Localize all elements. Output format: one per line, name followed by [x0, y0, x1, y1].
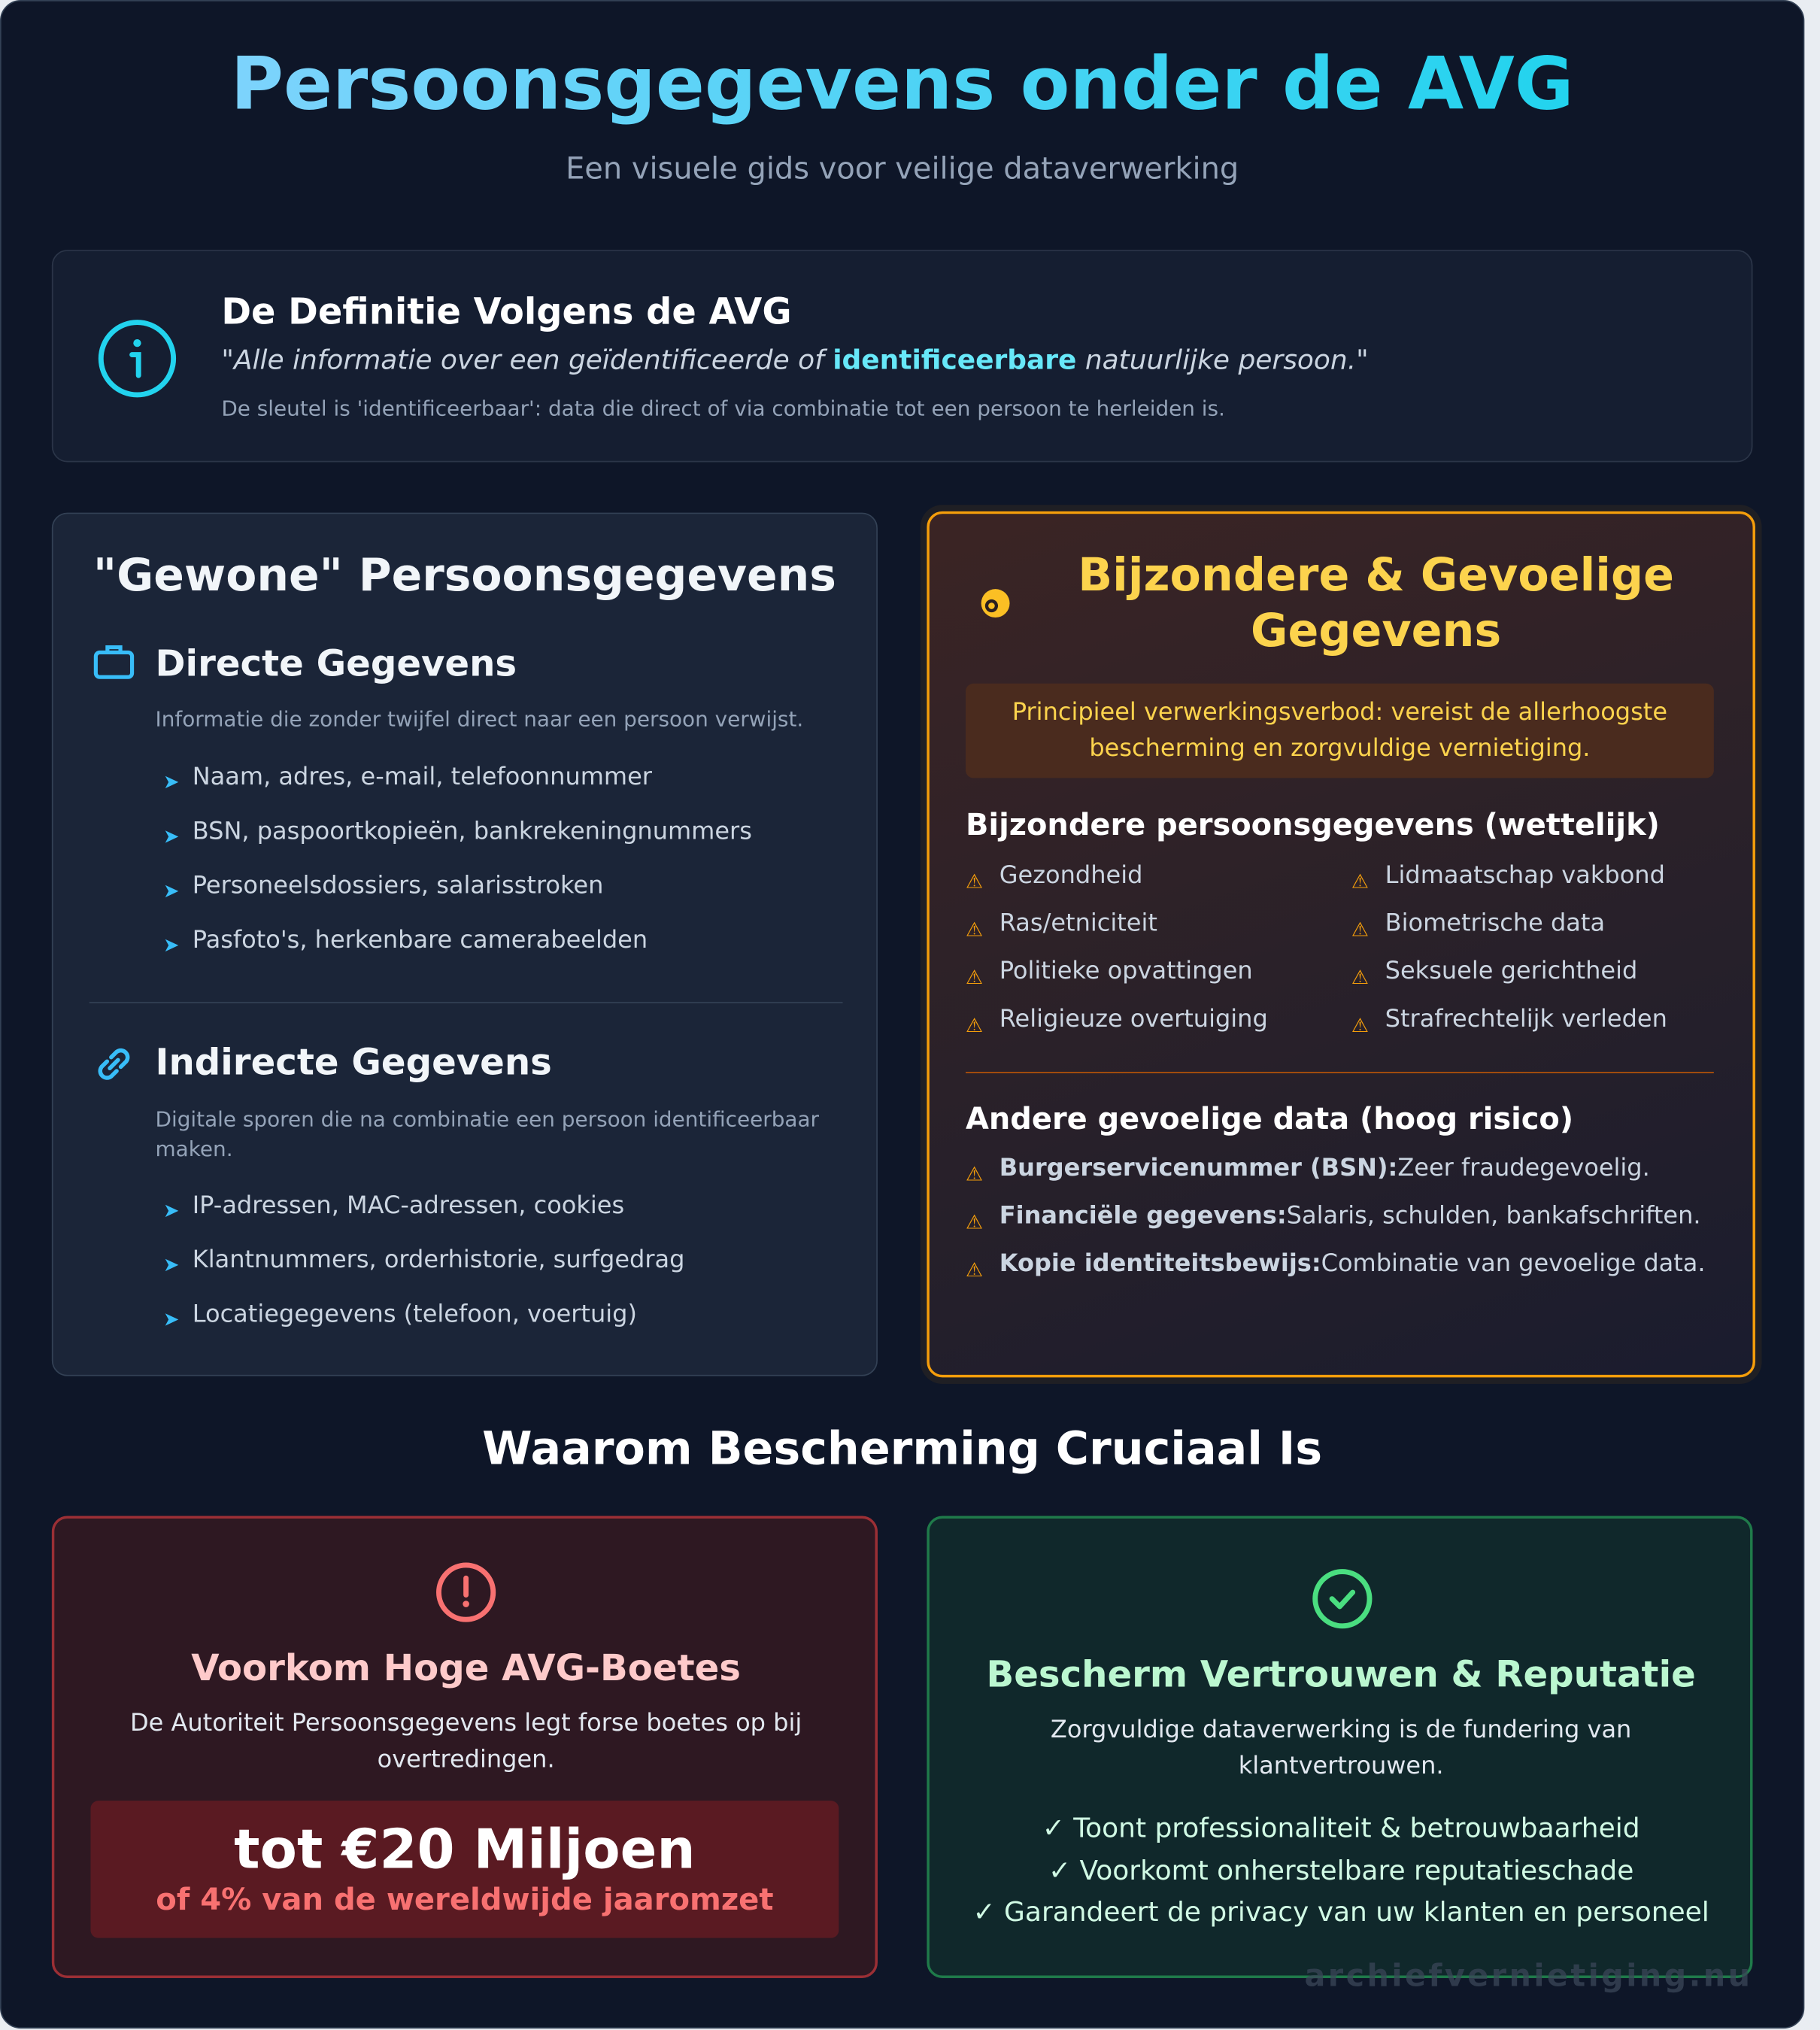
list: hoog risico: Kopie identiteitsbewijs:Combinatie van gevoelige data.: [999, 1251, 1706, 1278]
checklist: [973, 1813, 1709, 1928]
list: indirect: IP-adressen, MAC-adressen, cookies: [193, 1192, 624, 1219]
icon: briefcase: [93, 645, 134, 679]
list: direct: [163, 764, 752, 957]
subheading: indirect: Indirecte Gegevens: [156, 1041, 552, 1084]
icon: check: [1312, 1569, 1372, 1629]
callout: fine: tot €20 Miljoen: [234, 1818, 696, 1881]
subheading: wettelijk: Bijzondere persoonsgegevens (wettelijk): [966, 808, 1660, 842]
grid: categories: Biometrische data: [1385, 910, 1605, 937]
panel: gewone persoonsgegevens: [52, 513, 878, 1376]
list: hoog risico: Financiële gegevens:Salaris, schulden, bankafschriften.: [999, 1203, 1701, 1230]
grid: categories: Strafrechtelijk verleden: [1385, 1006, 1667, 1033]
description: direct: Informatie die zonder twijfel direct naar een persoon verwijst.: [156, 707, 803, 731]
icon: special: [981, 589, 1010, 617]
title: Persoonsgegevens onder de AVG: [231, 43, 1574, 127]
list: hoog risico: ⚠: [966, 1258, 983, 1282]
grid: categories: ⚠: [1351, 1014, 1369, 1037]
grid: categories: Ras/etniciteit: [999, 910, 1157, 937]
panel heading: "Gewone" Persoonsgegevens: [93, 551, 836, 602]
list: indirect: [163, 1192, 684, 1331]
panel: definition: [52, 250, 1752, 462]
description: klantvertrouwen.: [1239, 1752, 1444, 1780]
list: direct: Pasfoto's, herkenbare camerabeelden: [193, 927, 648, 954]
watermark: archiefvernietiging.nu: [1304, 1957, 1752, 1994]
grid: categories: ⚠: [1351, 870, 1369, 894]
grid: categories: ⚠: [966, 918, 983, 941]
grid: categories: Gezondheid: [999, 862, 1142, 889]
grid: categories: Religieuze overtuiging: [999, 1006, 1268, 1033]
callout: verbod: Principieel verwerkingsverbod: vereist de allerhoogste: [1012, 699, 1667, 727]
panel heading: Gegevens: [1251, 606, 1501, 657]
description: De Autoriteit Persoonsgegevens legt forse boetes op bij: [130, 1710, 802, 1737]
section heading: Waarom Bescherming Cruciaal Is: [482, 1424, 1322, 1476]
grid: categories: ⚠: [1351, 966, 1369, 989]
callout: fine: of 4% van de wereldwijde jaaromzet: [156, 1883, 774, 1917]
callout: verbod: bescherming en zorgvuldige vernietiging.: [1089, 736, 1590, 763]
description: [1051, 1716, 1631, 1780]
checklist: ✓ Voorkomt onherstelbare reputatieschade: [1048, 1855, 1633, 1886]
list: indirect: Klantnummers, orderhistorie, surfgedrag: [193, 1247, 684, 1274]
list: hoog risico: Burgerservicenummer (BSN):Zeer fraudegevoelig.: [999, 1155, 1650, 1182]
list: direct: BSN, paspoortkopieën, bankrekeningnummers: [193, 818, 752, 845]
grid: categories: Seksuele gerichtheid: [1385, 958, 1637, 985]
subtitle: Een visuele gids voor veilige dataverwerking: [566, 151, 1239, 187]
definition heading: De Definitie Volgens de AVG: [221, 290, 792, 332]
list: indirect: ➤: [163, 1307, 180, 1331]
grid: categories: Politieke opvattingen: [999, 958, 1253, 985]
list: direct: ➤: [163, 770, 180, 793]
panel: vertrouwen: [927, 1516, 1752, 1978]
description: [130, 1710, 802, 1774]
icon: alert: [436, 1563, 496, 1622]
list: hoog risico: ⚠: [966, 1210, 983, 1233]
panel heading: [1078, 551, 1674, 657]
list: hoog risico: ⚠: [966, 1163, 983, 1186]
list: direct: ➤: [163, 879, 180, 903]
list: direct: ➤: [163, 824, 180, 848]
quote: "Alle informatie over een geïdentificeerde of identificeerbare natuurlijke persoon.": [221, 344, 1369, 375]
grid: categories: [966, 862, 1667, 1037]
description: indirect: Digitale sporen die na combinatie een persoon identificeerbaar maken.: [156, 1107, 819, 1161]
grid: categories: Lidmaatschap vakbond: [1385, 862, 1665, 889]
note: De sleutel is 'identificeerbaar': data die direct of via combinatie tot een persoon te herleiden is.: [221, 396, 1225, 420]
list: hoog risico: [966, 1155, 1706, 1282]
grid: categories: ⚠: [966, 966, 983, 989]
panel heading: Bijzondere & Gevoelige: [1078, 551, 1674, 602]
list: indirect: ➤: [163, 1253, 180, 1276]
panel: boetes: [52, 1516, 878, 1978]
callout: verbod: [966, 684, 1714, 778]
grid: categories: ⚠: [966, 870, 983, 894]
heading: Bescherm Vertrouwen & Reputatie: [986, 1653, 1696, 1696]
subheading: direct: Directe Gegevens: [156, 642, 517, 685]
list: direct: Naam, adres, e-mail, telefoonnummer: [193, 764, 652, 791]
icon: link: [98, 1048, 129, 1080]
checklist: ✓ Garandeert de privacy van uw klanten en personeel: [973, 1897, 1709, 1928]
description: Zorgvuldige dataverwerking is de fundering van: [1051, 1716, 1631, 1743]
list: direct: Personeelsdossiers, salarisstroken: [193, 872, 603, 900]
subheading: hoog risico: Andere gevoelige data (hoog risico): [966, 1102, 1573, 1136]
grid: categories: ⚠: [1351, 918, 1369, 941]
list: indirect: Locatiegegevens (telefoon, voertuig): [193, 1301, 637, 1328]
panel: bijzondere gegevens: [927, 511, 1755, 1377]
list: indirect: ➤: [163, 1199, 180, 1222]
grid: categories: ⚠: [966, 1014, 983, 1037]
description: overtredingen.: [378, 1746, 555, 1774]
icon: info: [98, 320, 176, 397]
checklist: ✓ Toont professionaliteit & betrouwbaarheid: [1042, 1813, 1640, 1843]
list: direct: ➤: [163, 933, 180, 957]
callout: fine: [90, 1801, 839, 1938]
heading: Voorkom Hoge AVG-Boetes: [191, 1646, 741, 1689]
